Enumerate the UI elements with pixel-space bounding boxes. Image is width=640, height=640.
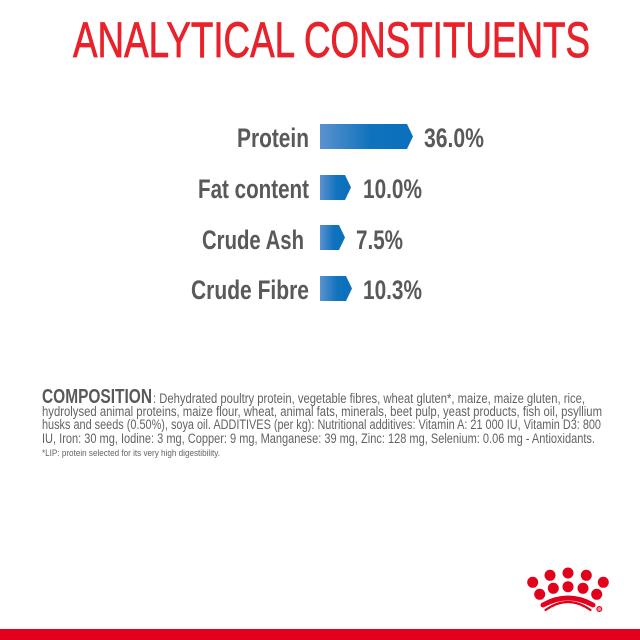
icon: royal canin crown logo — [527, 568, 609, 612]
label: crude ash: Crude Ash — [202, 225, 304, 255]
value: crude ash: 7.5% — [356, 225, 403, 255]
composition heading: COMPOSITION — [42, 386, 152, 408]
composition text block — [42, 386, 602, 458]
row: fat content — [198, 174, 422, 204]
row: crude ash — [202, 225, 403, 255]
row: protein — [237, 123, 484, 153]
value: fat content: 10.0% — [363, 174, 422, 204]
bar: crude fibre — [320, 276, 352, 301]
footnote: *LIP: protein selected for its very high digestibility. — [42, 448, 220, 458]
bar: crude ash — [320, 225, 345, 250]
label: crude fibre: Crude Fibre — [191, 275, 309, 305]
row: crude fibre — [191, 275, 422, 305]
chart: analytical constituents — [191, 123, 484, 305]
label: protein: Protein — [237, 123, 309, 153]
bottom red band — [0, 629, 640, 640]
bar: fat content — [320, 175, 351, 200]
value: protein: 36.0% — [424, 123, 484, 153]
value: crude fibre: 10.3% — [363, 275, 422, 305]
bar: protein — [320, 124, 413, 149]
label: fat content: Fat content — [198, 174, 309, 204]
